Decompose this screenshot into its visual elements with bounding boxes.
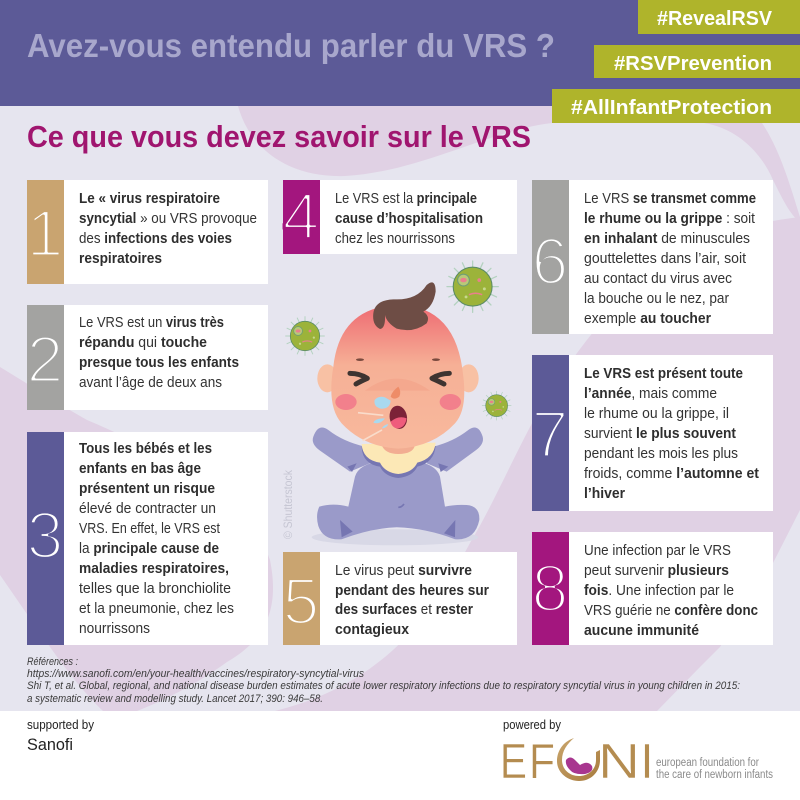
EFCNI logo: european foundation for <box>656 757 759 769</box>
card 6: au contact du virus avec <box>584 271 732 287</box>
card 2: 2 <box>27 322 63 396</box>
card 3: la principale cause de <box>79 541 219 557</box>
card 3: maladies respiratoires, <box>79 561 229 577</box>
card 4: Le VRS est la principale <box>335 191 477 207</box>
card 5: contagieux <box>335 622 409 638</box>
card 7: froids, comme l’automne et <box>584 466 759 482</box>
footer band <box>0 711 800 800</box>
card 2 <box>27 305 268 410</box>
card 6 <box>532 180 773 334</box>
card 1: 1 <box>27 196 63 270</box>
header band <box>0 0 800 106</box>
card 5 <box>283 552 517 645</box>
card 7: survient le plus souvent <box>584 426 736 442</box>
card 2: répandu qui touche <box>79 335 207 351</box>
card 4: 4 <box>283 179 319 253</box>
main title: Avez-vous entendu parler du VRS ? <box>27 27 555 64</box>
card 7: le rhume ou la grippe, il <box>584 406 729 422</box>
supported by: Sanofi <box>27 735 73 754</box>
card 1: des infections des voies <box>79 231 232 247</box>
card 8: VRS guérie ne confère donc <box>584 603 758 619</box>
card 1: respiratoires <box>79 251 162 267</box>
references: a systematic review and modelling study. Lancet 2017; 390: 946–58. <box>27 693 323 705</box>
card 5: 5 <box>283 564 319 638</box>
card 7: Le VRS est présent toute <box>584 366 743 382</box>
card 3: élevé de contracter un <box>79 501 216 517</box>
hashtag: RevealRSV: #RevealRSV <box>657 8 773 30</box>
references: Références : <box>27 656 78 668</box>
card 2: avant l’âge de deux ans <box>79 375 222 391</box>
references <box>27 656 740 705</box>
supported by <box>27 717 94 754</box>
card 7: l’hiver <box>584 486 625 502</box>
card 8: aucune immunité <box>584 623 699 639</box>
section heading: Ce que vous devez savoir sur le VRS <box>27 119 531 154</box>
card 4: chez les nourrissons <box>335 231 455 247</box>
card 7: 7 <box>532 397 568 471</box>
card 5: des surfaces et rester <box>335 602 473 618</box>
EFCNI logo <box>500 735 773 789</box>
card 3: Tous les bébés et les <box>79 441 212 457</box>
card 6: Le VRS se transmet comme <box>584 191 756 207</box>
EFCNI logo: F <box>529 735 555 789</box>
card 8: 8 <box>532 551 568 625</box>
card 2: Le VRS est un virus très <box>79 315 224 331</box>
card 5: Le virus peut survivre <box>335 563 472 579</box>
card 7: pendant les mois les plus <box>584 446 738 462</box>
card 8: Une infection par le VRS <box>584 543 731 559</box>
hashtag: RSVPrevention <box>594 45 800 78</box>
references: https://www.sanofi.com/en/your-health/vaccines/respiratory-syncytial-virus <box>27 668 364 680</box>
EFCNI logo: I <box>640 735 654 789</box>
page background <box>0 106 800 711</box>
card 4 <box>283 179 517 254</box>
card 8 <box>532 532 773 645</box>
card 3: enfants en bas âge <box>79 461 201 477</box>
card 1 <box>27 180 268 284</box>
hashtag: AllInfantProtection: #AllInfantProtection <box>571 97 772 119</box>
card 6: en inhalant de minuscules <box>584 231 750 247</box>
image credit: © Shutterstock <box>281 469 295 539</box>
card 3 <box>27 432 268 645</box>
hashtag: RevealRSV <box>638 0 800 34</box>
references: Shi T, et al. Global, regional, and national disease burden estimates of acute lower respiratory infections due to respiratory syncytial virus in young children in 2015: <box>27 680 740 692</box>
card 6: gouttelettes dans l’air, soit <box>584 251 746 267</box>
EFCNI logo: the care of newborn infants <box>656 769 773 781</box>
card 3: nourrissons <box>79 621 150 637</box>
powered by: powered by <box>503 717 561 732</box>
card 3: 3 <box>27 498 63 572</box>
card 6: exemple au toucher <box>584 311 711 327</box>
background shapes <box>0 106 800 711</box>
supported by: supported by <box>27 717 94 732</box>
card 2: presque tous les enfants <box>79 355 239 371</box>
card 3: telles que la bronchiolite <box>79 581 231 597</box>
card 5: pendant des heures sur <box>335 583 489 599</box>
card 3: VRS. En effet, le VRS est <box>79 521 220 537</box>
card 8: peut survenir plusieurs <box>584 563 729 579</box>
card 3: présentent un risque <box>79 481 215 497</box>
card 6: la bouche ou le nez, par <box>584 291 729 307</box>
card 1: syncytial » ou VRS provoque <box>79 211 257 227</box>
card 6: le rhume ou la grippe : soit <box>584 211 755 227</box>
EFCNI logo: E <box>500 735 527 789</box>
hashtag: RSVPrevention: #RSVPrevention <box>614 53 772 75</box>
card 8: fois. Une infection par le <box>584 583 734 599</box>
card 7 <box>532 355 773 511</box>
card 3: et la pneumonie, chez les <box>79 601 234 617</box>
card 7: l’année, mais comme <box>584 386 717 402</box>
illustration: sneezing baby with viruses <box>286 261 511 545</box>
card 1: Le « virus respiratoire <box>79 191 220 207</box>
hashtag: AllInfantProtection <box>552 89 800 123</box>
card 6: 6 <box>532 224 568 298</box>
card 4: cause d’hospitalisation <box>335 211 483 227</box>
EFCNI logo: N <box>598 735 640 789</box>
